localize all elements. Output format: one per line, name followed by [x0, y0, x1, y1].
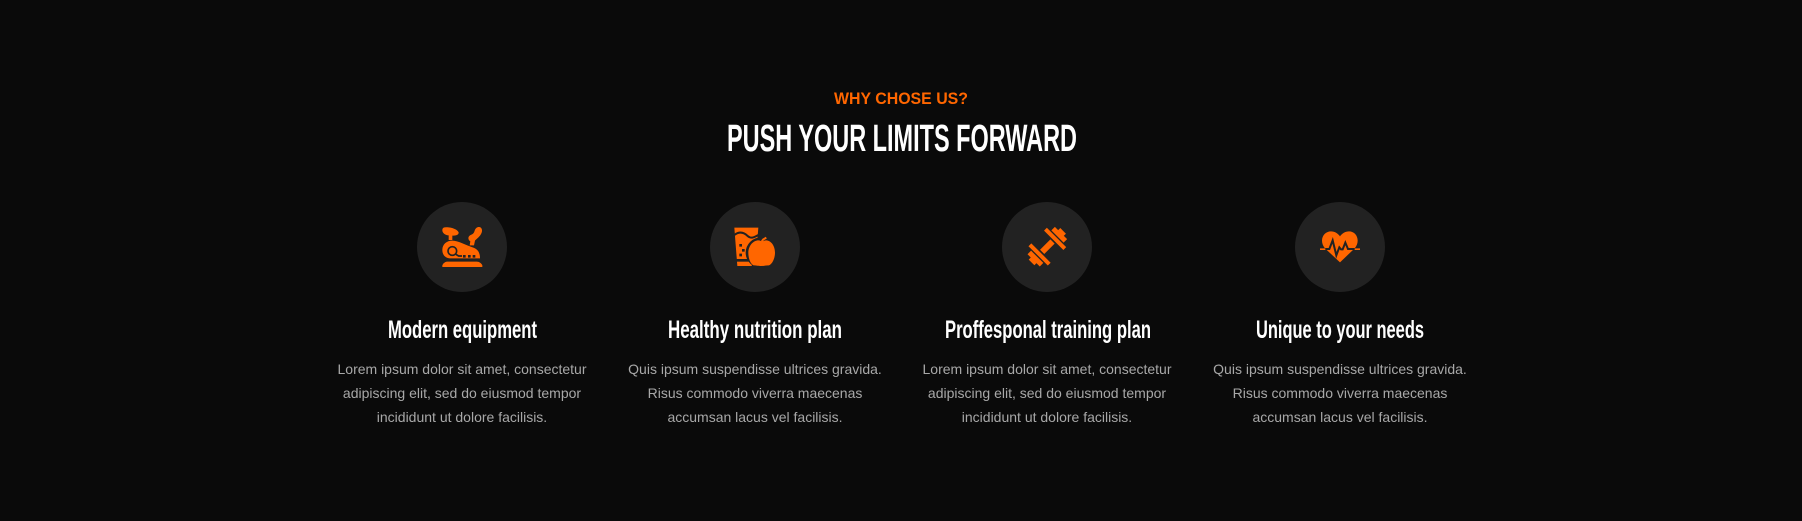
eyebrow heading: WHY CHOSE US? [834, 89, 968, 108]
text block: unique to your needs [1213, 361, 1467, 425]
text block: healthy nutrition plan: accumsan lacus vel facilisis. [667, 409, 843, 425]
text block: healthy nutrition plan [628, 361, 882, 425]
text block: healthy nutrition plan: Risus commodo viverra maecenas [648, 385, 862, 401]
panel: healthy nutrition plan [628, 202, 882, 425]
text block: professional training plan: incididunt ut dolore facilisis. [962, 409, 1132, 425]
text block: healthy nutrition plan: Quis ipsum suspendisse ultrices gravida. [628, 361, 882, 377]
text block: modern equipment: adipiscing elit, sed do eiusmod tempor [343, 385, 581, 401]
icon: dumbbell [1002, 202, 1092, 292]
text block: modern equipment: incididunt ut dolore facilisis. [377, 409, 547, 425]
text block: modern equipment [338, 361, 587, 425]
icon: heart with pulse [1295, 202, 1385, 292]
heading: healthy nutrition plan: Healthy nutrition plan [668, 316, 842, 344]
text block: modern equipment: Lorem ipsum dolor sit amet, consectetur [338, 361, 587, 377]
panel: unique to your needs [1213, 202, 1467, 425]
text block: professional training plan: Lorem ipsum dolor sit amet, consectetur [922, 361, 1172, 377]
heading: professional training plan: Proffesponal training plan [945, 316, 1151, 344]
text block: unique to your needs: Quis ipsum suspendisse ultrices gravida. [1213, 361, 1467, 377]
panel: modern equipment [338, 202, 587, 425]
icon: juice and apple [710, 202, 800, 292]
icon: exercise bike [417, 202, 507, 292]
text block: professional training plan: adipiscing elit, sed do eiusmod tempor [928, 385, 1166, 401]
title: PUSH YOUR LIMITS FORWARD [727, 118, 1077, 160]
heading: unique to your needs: Unique to your needs [1256, 316, 1424, 344]
heading: modern equipment: Modern equipment [388, 316, 537, 344]
panel: professional training plan [922, 202, 1172, 425]
text block: unique to your needs: Risus commodo viverra maecenas [1233, 385, 1447, 401]
text block: unique to your needs: accumsan lacus vel facilisis. [1252, 409, 1428, 425]
text block: professional training plan [922, 361, 1172, 425]
